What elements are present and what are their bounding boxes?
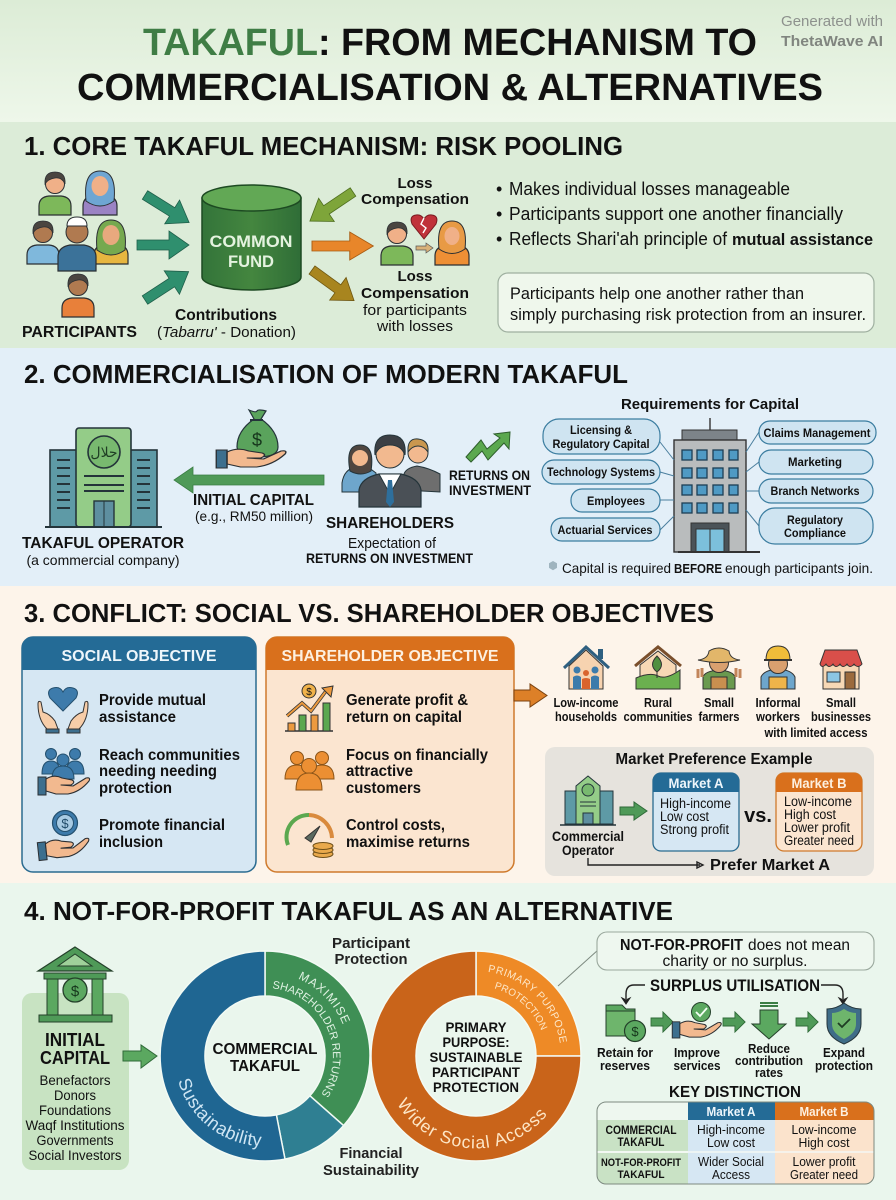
chart: not-for-profit donut: [372, 952, 580, 1160]
chart: commercial takaful donut: TAKAFUL: [230, 1058, 300, 1075]
chart: not-for-profit donut: PROTECTION: [433, 1079, 519, 1095]
table: key distinction: High-income: [697, 1122, 765, 1137]
arrow: operator to market A: [620, 802, 647, 820]
arrow: initial capital: [174, 467, 324, 493]
card: shareholder objective: [266, 637, 514, 872]
requirement pills right: [759, 421, 876, 544]
connectors: [660, 432, 759, 530]
table: key distinction: [597, 1102, 874, 1184]
panel: initial capital: Donors: [54, 1088, 96, 1103]
card: shareholder objective: Control costs,: [346, 817, 445, 834]
arrows: contributions into fund: [137, 183, 197, 312]
requirement pills right: Compliance: [784, 526, 846, 540]
table: key distinction: Low cost: [707, 1135, 755, 1150]
bullets: Participants support one another financially: [509, 204, 843, 224]
label: returns on investment: RETURNS ON: [449, 467, 530, 483]
bullets: •: [496, 229, 502, 249]
labels: surplus uses: protection: [815, 1058, 873, 1073]
label: participant protection: Participant: [332, 935, 410, 952]
labels: surplus uses: Reduce: [748, 1041, 790, 1056]
chart: not-for-profit donut: SUSTAINABLE: [430, 1049, 522, 1065]
watermark: Generated with: [781, 13, 883, 30]
arrow: step 1: [651, 1012, 673, 1032]
card: market B: Greater need: [784, 833, 854, 848]
chart: commercial takaful donut: Sustainability: [179, 1078, 262, 1150]
heading: surplus utilisation: [622, 976, 847, 1004]
icon: participants group: [27, 171, 128, 317]
heading 2: 2. COMMERCIALISATION OF MODERN TAKAFUL: [24, 359, 628, 389]
label: takaful operator: (a commercial company): [26, 552, 180, 568]
label: initial capital: (e.g., RM50 million): [195, 508, 313, 524]
panel: initial capital: Governments: [36, 1133, 114, 1148]
chart: not-for-profit donut: PURPOSE:: [442, 1034, 510, 1050]
panel: initial capital: [22, 947, 129, 1170]
arrow: step 3: [796, 1012, 818, 1032]
note: capital before participants: [549, 560, 873, 576]
card: social objective: protection: [99, 780, 172, 797]
panel: market preference example: Prefer Market A: [710, 857, 830, 874]
icon: retain for reserves: $: [631, 1024, 639, 1039]
bullets: mutual assistance: [732, 230, 873, 249]
card: social objective: assistance: [99, 709, 176, 726]
card: market B: [776, 773, 862, 851]
icon: reduce contribution rates: [752, 1003, 786, 1039]
card: shareholder objective: customers: [346, 780, 421, 797]
icon: office building: [674, 418, 760, 552]
label: participant protection: [332, 935, 410, 968]
icon: coin in hand: [37, 810, 90, 861]
card: market A: Low cost: [660, 809, 709, 824]
label: shareholders: [306, 515, 473, 566]
icon: coin in hand: $: [61, 816, 69, 831]
requirement pills left: Regulatory Capital: [552, 437, 650, 451]
table: key distinction: Market B: [800, 1105, 848, 1119]
label: loss compensation top: Loss: [397, 175, 433, 192]
card: shareholder objective: return on capital: [346, 709, 462, 726]
panel: market preference example: Operator: [562, 843, 615, 858]
icon: bank: [38, 947, 112, 1022]
icon: small farmer: [698, 648, 740, 689]
label: returns on investment: [449, 467, 531, 498]
card: social objective: Provide mutual: [99, 692, 206, 709]
table: key distinction: Access: [712, 1167, 750, 1182]
icon: low-income household: [564, 647, 609, 689]
card: social objective: needing needing: [99, 763, 217, 780]
heading 4: 4. NOT-FOR-PROFIT TAKAFUL AS AN ALTERNATIVE: [24, 896, 673, 926]
chart: not-for-profit donut: PARTICIPANT: [432, 1064, 520, 1080]
labels: surplus uses: Retain for: [597, 1045, 653, 1060]
chart: not-for-profit donut: Wider Social Access: [398, 1096, 546, 1148]
labels: underserved groups: Informal: [756, 696, 800, 710]
requirement pills left: Employees: [587, 494, 645, 508]
requirement pills left: Actuarial Services: [558, 523, 653, 537]
table: key distinction: TAKAFUL: [618, 1169, 665, 1181]
labels: surplus uses: rates: [755, 1065, 783, 1080]
label: participant protection: Protection: [334, 951, 408, 968]
panel: commercialisation: [0, 348, 896, 586]
arrow: compensation out: [304, 259, 362, 312]
panel: core takaful mechanism: [0, 122, 896, 348]
label: financial sustainability: [323, 1145, 420, 1179]
arrow: capital to commercial takaful: [123, 1045, 157, 1068]
label: initial capital: INITIAL CAPITAL: [193, 492, 314, 509]
chart: commercial takaful donut: COMMERCIAL: [212, 1041, 318, 1058]
icon: common fund cylinder: [202, 185, 301, 290]
label: loss compensation bottom: [361, 268, 469, 335]
labels: underserved groups: farmers: [698, 710, 740, 724]
table: key distinction: Low-income: [792, 1122, 856, 1137]
requirement pills right: Branch Networks: [770, 484, 860, 498]
labels: surplus uses: Improve: [674, 1045, 720, 1060]
title: [77, 22, 823, 109]
icon: hands and heart: [38, 688, 88, 733]
note: capital before participants: BEFORE: [674, 561, 722, 576]
icon: shareholders: [342, 435, 440, 507]
heading 1: 1. CORE TAKAFUL MECHANISM: RISK POOLING: [24, 131, 623, 161]
icon: takaful operator building: حلال: [90, 445, 118, 461]
panel: market preference example: Market Preference Example: [616, 751, 813, 768]
icon: cost gauge and coins: [286, 815, 333, 858]
watermark: ThetaWave AI: [781, 33, 883, 50]
panel: initial capital: Benefactors: [40, 1073, 111, 1088]
arrow: loss compensation in: [302, 180, 361, 233]
card: market B: Low-income: [784, 794, 852, 809]
card: market B: Lower profit: [784, 820, 850, 835]
callout: not-for-profit meaning: does not mean: [748, 937, 850, 954]
label: takaful operator: TAKAFUL OPERATOR: [22, 535, 184, 552]
note: capital before participants: Capital is required: [562, 560, 671, 576]
callout: [498, 273, 874, 332]
requirement pills right: Claims Management: [764, 426, 870, 440]
panel: initial capital: Foundations: [39, 1103, 111, 1118]
table: key distinction: High cost: [798, 1135, 850, 1150]
label: loss compensation top: Compensation: [361, 191, 469, 208]
label: participants: PARTICIPANTS: [22, 324, 137, 341]
label: loss compensation top: [361, 175, 469, 208]
heading: key distinction: KEY DISTINCTION: [669, 1084, 801, 1101]
callout: not-for-profit meaning: charity or no surplus.: [662, 953, 808, 970]
icon: expand protection shield: [827, 1003, 861, 1044]
label: shareholders: RETURNS ON INVESTMENT: [306, 550, 473, 566]
bullets: Reflects Shari'ah principle of: [509, 229, 728, 249]
table: key distinction: Market A: [706, 1105, 756, 1119]
label: loss compensation bottom: Compensation: [361, 285, 469, 302]
labels: surplus uses: Expand: [823, 1045, 865, 1060]
card: market B: High cost: [784, 807, 836, 822]
arrow: step 2: [723, 1012, 745, 1032]
labels: underserved groups: households: [555, 710, 617, 724]
table: key distinction: COMMERCIAL: [606, 1125, 676, 1137]
heading: surplus utilisation: SURPLUS UTILISATION: [650, 976, 820, 995]
card: market A: [653, 773, 739, 851]
card: shareholder objective: attractive: [346, 763, 413, 780]
arrow: payout: [312, 232, 373, 260]
label: vs: vs.: [744, 805, 772, 827]
icon: common fund cylinder: COMMON: [210, 232, 292, 251]
icon: bank: $: [71, 983, 80, 1000]
chart: not-for-profit donut: PRIMARY PURPOSE: [488, 964, 567, 1043]
title: COMMERCIALISATION & ALTERNATIVES: [77, 67, 823, 109]
card: market B: Market B: [792, 775, 846, 791]
table: key distinction: Greater need: [790, 1167, 858, 1182]
labels: underserved groups: businesses: [811, 710, 871, 724]
card: social objective: Promote financial: [99, 817, 225, 834]
label: contributions: (Tabarru' - Donation): [157, 324, 296, 341]
requirement pills left: Technology Systems: [547, 465, 655, 479]
labels: underserved groups: Rural: [644, 696, 672, 710]
icon: customers group: [285, 752, 334, 790]
title: : FROM MECHANISM TO: [318, 22, 757, 64]
label: shareholders: SHAREHOLDERS: [326, 515, 454, 532]
card: market A: High-income: [660, 796, 731, 811]
icon: profit chart: [285, 684, 333, 731]
note: capital before participants: enough participants join.: [725, 560, 873, 576]
label: loss compensation bottom: for participants: [363, 303, 467, 319]
label: loss compensation bottom: Loss: [397, 268, 433, 285]
table: key distinction: Lower profit: [792, 1154, 856, 1169]
label: shareholders: Expectation of: [348, 536, 437, 552]
labels: underserved groups: communities: [624, 710, 693, 724]
requirement pills left: [542, 419, 660, 541]
label: contributions: [157, 307, 296, 341]
requirement pills left: Licensing &: [570, 423, 632, 437]
labels: surplus uses: [597, 1041, 873, 1080]
label: returns on investment: INVESTMENT: [449, 482, 531, 498]
callout: simply purchasing risk protection from an insurer.: [510, 306, 866, 324]
bullets: [496, 179, 873, 249]
label: takaful operator: [22, 535, 184, 568]
labels: surplus uses: reserves: [600, 1058, 650, 1073]
labels: underserved groups: Small: [704, 696, 734, 710]
card: shareholder objective: Focus on financially: [346, 747, 488, 764]
bullets: •: [496, 179, 502, 199]
label: financial sustainability: Financial: [340, 1145, 402, 1162]
label: financial sustainability: Sustainability: [323, 1162, 420, 1179]
bullets: •: [496, 204, 502, 224]
icon: rural community: [635, 647, 681, 689]
icon: profit chart: $: [306, 687, 312, 698]
card: social objective: [22, 637, 256, 872]
icon: community in hand: [38, 748, 90, 795]
heading 3: 3. CONFLICT: SOCIAL VS. SHAREHOLDER OBJECTIVES: [24, 598, 714, 628]
chart: not-for-profit donut: PRIMARY: [446, 1019, 507, 1035]
label: loss compensation bottom: with losses: [376, 319, 453, 335]
icon: commercial operator: [560, 776, 616, 825]
table: key distinction: Wider Social: [698, 1154, 764, 1169]
panel: market preference example: Commercial: [552, 829, 624, 844]
card: market A: Market A: [668, 775, 724, 791]
icon: growth arrow: [466, 432, 510, 462]
callout: not-for-profit meaning: NOT-FOR-PROFIT: [620, 937, 743, 954]
icon: retain for reserves: [606, 1005, 646, 1042]
label: initial capital: [193, 492, 314, 524]
card: social objective: SOCIAL OBJECTIVE: [62, 648, 217, 665]
icon: affected participants with broken heart: [381, 215, 469, 265]
icon: money bag on hand: $: [252, 430, 262, 450]
card: social objective: Reach communities: [99, 747, 240, 764]
watermark: [781, 13, 883, 50]
label: requirements for capital: Requirements for Capital: [621, 396, 799, 413]
labels: surplus uses: services: [674, 1058, 720, 1073]
panel: initial capital: INITIAL: [45, 1030, 105, 1050]
panel: market preference example: [545, 747, 874, 876]
icon: money bag on hand: [216, 410, 286, 468]
labels: underserved groups: workers: [755, 710, 800, 724]
requirement pills right: Marketing: [788, 455, 842, 469]
labels: underserved groups: Small: [826, 696, 856, 710]
card: shareholder objective: SHAREHOLDER OBJECTIVE: [282, 648, 499, 665]
labels: surplus uses: contribution: [735, 1053, 803, 1068]
icon: common fund cylinder: FUND: [228, 252, 274, 271]
labels: underserved groups: [554, 696, 871, 740]
arrow: prefer market A: [588, 858, 703, 868]
arrow: to underserved groups: [514, 684, 547, 707]
card: shareholder objective: maximise returns: [346, 834, 470, 851]
card: social objective: inclusion: [99, 834, 163, 851]
panel: initial capital: Waqf Institutions: [26, 1118, 125, 1133]
panel: not-for-profit: [0, 883, 896, 1200]
bullets: Makes individual losses manageable: [509, 179, 790, 199]
card: shareholder objective: Generate profit &: [346, 692, 468, 709]
chart: not-for-profit donut: PROTECTION: [494, 982, 548, 1030]
icon: small business: [820, 650, 862, 689]
icon: improve services: [672, 1002, 721, 1038]
table: key distinction: TAKAFUL: [618, 1137, 664, 1149]
icon: informal worker: [761, 646, 795, 689]
icon: takaful operator building: [45, 428, 162, 527]
header band: [0, 0, 896, 122]
title: TAKAFUL: [143, 22, 318, 64]
panel: conflict: [0, 586, 896, 883]
table: key distinction: NOT-FOR-PROFIT: [601, 1157, 681, 1169]
label: contributions: Contributions: [175, 307, 277, 324]
requirement pills right: Regulatory: [787, 513, 843, 527]
panel: initial capital: Social Investors: [28, 1148, 122, 1163]
callout: not-for-profit meaning: [558, 932, 874, 986]
card: market A: Strong profit: [660, 822, 729, 837]
panel: initial capital: CAPITAL: [40, 1048, 110, 1068]
labels: underserved groups: with limited access: [764, 726, 868, 740]
chart: commercial takaful donut: [160, 952, 370, 1160]
chart: commercial takaful donut: SHAREHOLDER RETURNS: [272, 981, 341, 1097]
labels: underserved groups: Low-income: [554, 696, 619, 710]
callout: Participants help one another rather than: [510, 285, 804, 303]
chart: commercial takaful donut: MAXIMISE: [298, 972, 350, 1024]
